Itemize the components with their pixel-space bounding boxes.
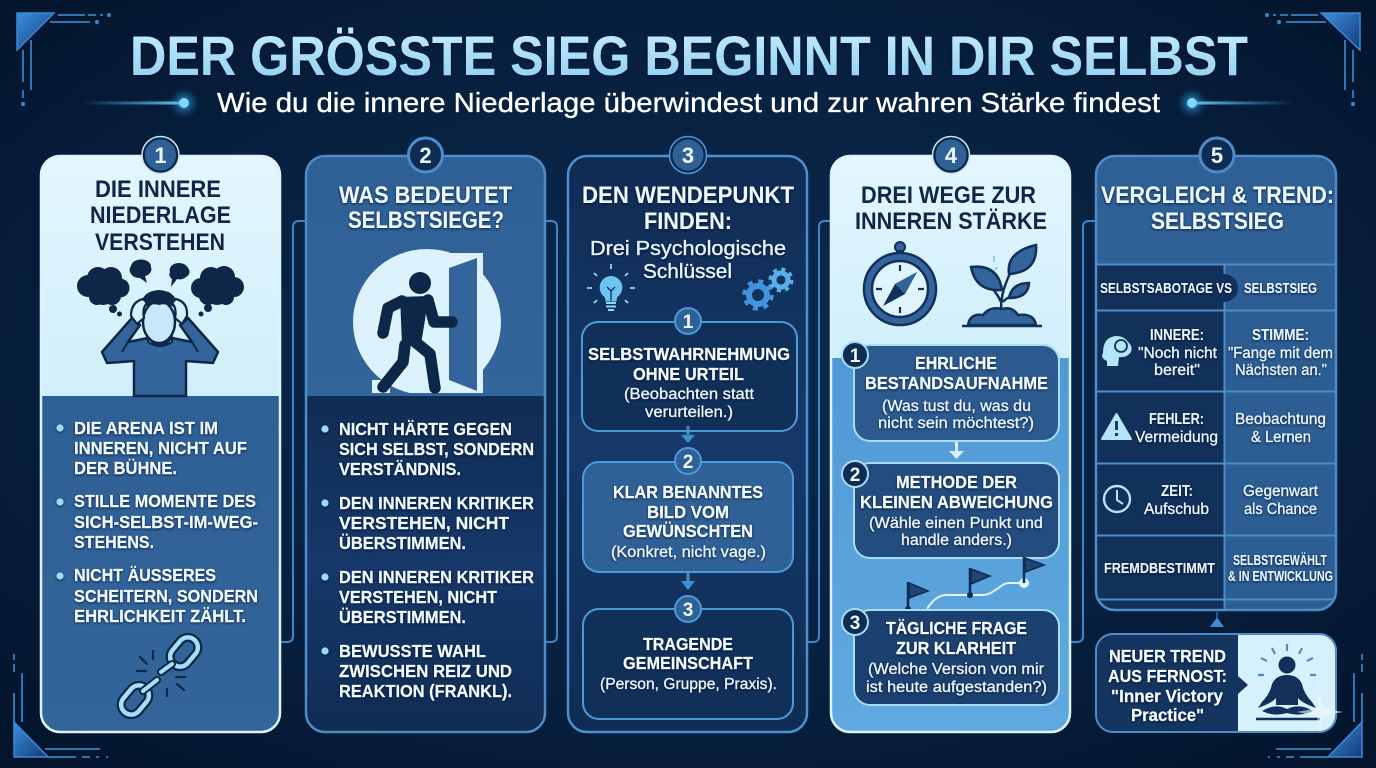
panel 2 bullet list: VERSTÄNDNIS. <box>339 459 461 479</box>
comparison table header: SELBSTSIEG <box>1244 280 1317 297</box>
panel 2 bullet list: BEWUSSTE WAHL <box>339 641 486 661</box>
panel 3 heading: Schlüssel <box>643 261 732 283</box>
panel 2 bullet list: REAKTION (FRANKL). <box>339 681 512 701</box>
connector brackets between panels <box>281 221 1095 642</box>
panel 1 bullet list: DER BÜHNE. <box>74 458 177 478</box>
icon: stressed person with thought clouds <box>77 259 244 396</box>
box: Selbstwahrnehmung ohne Urteil: OHNE URTEIL <box>633 364 744 384</box>
panel 5 background and table cells <box>1095 155 1337 611</box>
box: ehrliche Bestandsaufnahme: EHRLICHE <box>915 353 997 373</box>
panel 2 bullet list: ÜBERSTIMMEN. <box>339 533 466 553</box>
sparkle <box>1297 690 1343 733</box>
box: Methode der kleinen Abweichung: handle anders.) <box>901 532 1012 549</box>
table row: innere Stimme: INNERE: <box>1150 327 1204 344</box>
table row: Zeit: als Chance <box>1244 501 1317 518</box>
box: tägliche Frage zur Klarheit: ZUR KLARHEIT <box>896 638 1016 658</box>
panel 1: die innere Niederlage verstehen <box>40 136 281 733</box>
box: klar benanntes Bild: BILD VOM <box>647 502 729 522</box>
box: tägliche Frage zur Klarheit: ist heute aufgestanden?) <box>866 679 1047 696</box>
panel 1 bullet list: NICHT ÄUSSERES <box>74 565 216 585</box>
trend box: AUS FERNOST: <box>1108 666 1227 686</box>
panel 1 bullet list: SCHEITERN, SONDERN <box>74 586 258 606</box>
panel 2 heading: WAS BEDEUTET <box>339 182 512 209</box>
icon: light bulb <box>587 264 635 310</box>
corner decoration: bottom left <box>14 654 108 757</box>
table row: innere Stimme: STIMME: <box>1252 327 1309 344</box>
box: tragende Gemeinschaft: TRAGENDE <box>643 634 733 654</box>
box: tragende Gemeinschaft: 3 <box>683 600 693 621</box>
panel 4: drei Wege zur inneren Stärke <box>830 136 1071 733</box>
panel 2 heading <box>339 182 512 234</box>
panel 1 bullet list: EHRLICHKEIT ZÄHLT. <box>74 606 246 626</box>
panel 2: was bedeutet Selbstsiege <box>305 138 546 733</box>
box: Selbstwahrnehmung ohne Urteil: SELBSTWAHRNEHMUNG <box>588 344 790 364</box>
icon: milestone flags path <box>905 557 1044 612</box>
table row: fremdbestimmt vs selbstgewählt: SELBSTGEWÄHLT <box>1233 552 1327 569</box>
box: klar benanntes Bild: 2 <box>683 452 693 473</box>
subtitle: Wie du die innere Niederlage überwindest und zur wahren Stärke findest <box>217 87 1160 118</box>
title: DER GRÖSSTE SIEG BEGINNT IN DIR SELBST <box>130 24 1248 87</box>
box: Methode der kleinen Abweichung: 2 <box>850 465 860 486</box>
box: klar benanntes Bild: (Konkret, nicht vage.) <box>611 544 766 561</box>
box: tägliche Frage zur Klarheit: 3 <box>850 613 860 634</box>
box: ehrliche Bestandsaufnahme: 1 <box>850 346 861 367</box>
box: ehrliche Bestandsaufnahme: nicht sein möchtest?) <box>878 415 1034 432</box>
trend box: Practice" <box>1131 705 1204 725</box>
panel 2 heading: SELBSTSIEGE? <box>348 207 504 234</box>
panel 3 heading <box>582 182 794 283</box>
corner decoration: bottom right <box>1268 654 1362 757</box>
panel 1 bullet list: STILLE MOMENTE DES <box>74 491 256 511</box>
icon: compass <box>864 242 936 325</box>
comparison table header: SELBSTSABOTAGE VS <box>1100 280 1232 297</box>
table row: Zeit: Gegenwart <box>1243 483 1319 500</box>
box: Methode der kleinen Abweichung: KLEINEN ABWEICHUNG <box>860 492 1053 512</box>
panel 4 heading: DREI WEGE ZUR <box>861 182 1036 209</box>
icon: broken chain <box>117 633 202 719</box>
corner decoration: top right <box>1266 13 1360 105</box>
table row: innere Stimme: "Noch nicht <box>1138 345 1218 362</box>
panel 2 bullet list: VERSTEHEN, NICHT <box>339 513 509 533</box>
panel 3 heading: FINDEN: <box>644 208 732 235</box>
table row: Fehler: FEHLER: <box>1149 411 1204 428</box>
panel 1 bullet list: DIE ARENA IST IM <box>74 418 218 438</box>
panel 1 heading: DIE INNERE <box>95 176 221 203</box>
table row: innere Stimme: Nächsten an." <box>1235 362 1327 379</box>
table row: Fehler: Vermeidung <box>1135 429 1218 446</box>
panel 2 background <box>305 155 546 733</box>
table row: fremdbestimmt vs selbstgewählt: FREMDBESTIMMT <box>1104 560 1215 577</box>
box: tragende Gemeinschaft: GEMEINSCHAFT <box>623 653 753 673</box>
box: tägliche Frage zur Klarheit <box>842 609 1059 705</box>
badge 5: 5 <box>1211 143 1223 168</box>
accent line left of subtitle <box>80 94 193 112</box>
panel 2 bullet list: SICH SELBST, SONDERN <box>339 439 534 459</box>
icon: meditating person <box>1256 644 1320 719</box>
icon: person walking through door <box>353 249 501 395</box>
panel 1 bullet list: STEHENS. <box>74 532 154 552</box>
panel 3 heading: Drei Psychologische <box>590 238 786 260</box>
panel 2 bullet list: ÜBERSTIMMEN. <box>339 607 466 627</box>
panel 5 heading: VERGLEICH & TREND: <box>1101 182 1334 209</box>
panel 1 heading: NIEDERLAGE <box>90 202 231 229</box>
panel 5 heading <box>1101 182 1334 235</box>
panel 2 bullet list: VERSTEHEN, NICHT <box>339 587 497 607</box>
box: tägliche Frage zur Klarheit: TÄGLICHE FRAGE <box>886 618 1027 638</box>
box: Selbstwahrnehmung ohne Urteil: verurteilen.) <box>645 404 733 421</box>
corner decoration: top left <box>17 13 110 105</box>
panel 1 heading <box>90 176 231 256</box>
badge 3 <box>670 136 706 174</box>
table row: Zeit: Aufschub <box>1144 501 1209 518</box>
badge 1: 1 <box>154 143 167 168</box>
table row: innere Stimme: "Fange mit dem <box>1228 345 1333 362</box>
arrow: step 2 to step 3 <box>681 572 695 590</box>
badge 2: 2 <box>419 143 432 168</box>
panel 5: Vergleich und Trend <box>1095 138 1343 733</box>
box: ehrliche Bestandsaufnahme <box>842 342 1059 441</box>
panel 2 bullet list <box>321 419 534 701</box>
table row: innere Stimme <box>1102 327 1333 379</box>
arrow: step 1 to step 2 <box>681 426 695 443</box>
trend box: "Inner Victory <box>1111 686 1223 706</box>
panel 3 heading: DEN WENDEPUNKT <box>582 182 794 209</box>
table row: Fehler: Beobachtung <box>1235 411 1326 428</box>
panel 1 bullet list <box>56 418 258 626</box>
trend box <box>1095 633 1343 733</box>
box: klar benanntes Bild: KLAR BENANNTES <box>613 482 763 502</box>
badge 4 <box>932 136 970 174</box>
panel 4 heading <box>855 182 1047 235</box>
panel 3: den Wendepunkt finden <box>568 136 807 732</box>
box: Selbstwahrnehmung ohne Urteil <box>582 308 797 431</box>
box: tragende Gemeinschaft <box>583 596 793 719</box>
table row: Zeit: ZEIT: <box>1161 483 1193 500</box>
panel 3 background <box>568 156 807 732</box>
panel 1 heading: VERSTEHEN <box>95 229 225 256</box>
panel 1 bullet list: INNEREN, NICHT AUF <box>74 438 247 458</box>
box: Methode der kleinen Abweichung <box>842 461 1059 558</box>
panel 4 background <box>830 155 1071 733</box>
icon: plant <box>962 245 1042 326</box>
badge 5 <box>1200 138 1234 172</box>
panel 2 bullet list: DEN INNEREN KRITIKER <box>339 567 534 587</box>
box: ehrliche Bestandsaufnahme: (Was tust du, was du <box>882 398 1031 415</box>
comparison table header <box>1100 274 1317 302</box>
badge 2 <box>408 138 442 172</box>
box: Methode der kleinen Abweichung: METHODE DER <box>896 472 1017 492</box>
table row: fremdbestimmt vs selbstgewählt <box>1104 552 1333 585</box>
box: Selbstwahrnehmung ohne Urteil: 1 <box>683 312 694 333</box>
badge 1 <box>142 136 179 174</box>
table row: innere Stimme: bereit" <box>1154 362 1200 379</box>
box: Selbstwahrnehmung ohne Urteil: (Beobachten statt <box>624 386 755 403</box>
panel 1 bullet list: SICH-SELBST-IM-WEG- <box>74 512 258 532</box>
box: tragende Gemeinschaft: (Person, Gruppe, Praxis). <box>600 676 777 693</box>
panel 2 bullet list: NICHT HÄRTE GEGEN <box>339 419 512 439</box>
panel 5 heading: SELBSTSIEG <box>1151 208 1284 235</box>
badge 4: 4 <box>945 143 958 168</box>
panel 2 bullet list: DEN INNEREN KRITIKER <box>339 493 534 513</box>
box: tägliche Frage zur Klarheit: (Welche Version von mir <box>868 661 1044 678</box>
accent line right of subtitle <box>1183 94 1296 112</box>
panel 1 background <box>40 155 281 733</box>
panel 4 heading: INNEREN STÄRKE <box>855 208 1047 235</box>
trend box: NEUER TREND <box>1109 646 1226 666</box>
box: Methode der kleinen Abweichung: (Wähle einen Punkt und <box>869 515 1043 532</box>
box: ehrliche Bestandsaufnahme: BESTANDSAUFNAHME <box>865 373 1048 393</box>
box: klar benanntes Bild <box>583 448 793 572</box>
box: klar benanntes Bild: GEWÜNSCHTEN <box>623 521 753 541</box>
arrow: way 1 to way 2 <box>949 442 964 459</box>
arrow: trend to table <box>1210 612 1224 627</box>
icon: gears <box>744 270 792 308</box>
table row: Fehler: & Lernen <box>1251 429 1311 446</box>
badge 3: 3 <box>682 143 694 168</box>
panel 2 bullet list: ZWISCHEN REIZ UND <box>339 661 512 681</box>
table row: Zeit <box>1104 483 1319 518</box>
table row: fremdbestimmt vs selbstgewählt: & IN ENTWICKLUNG <box>1228 568 1333 585</box>
table row: Fehler <box>1102 411 1326 446</box>
